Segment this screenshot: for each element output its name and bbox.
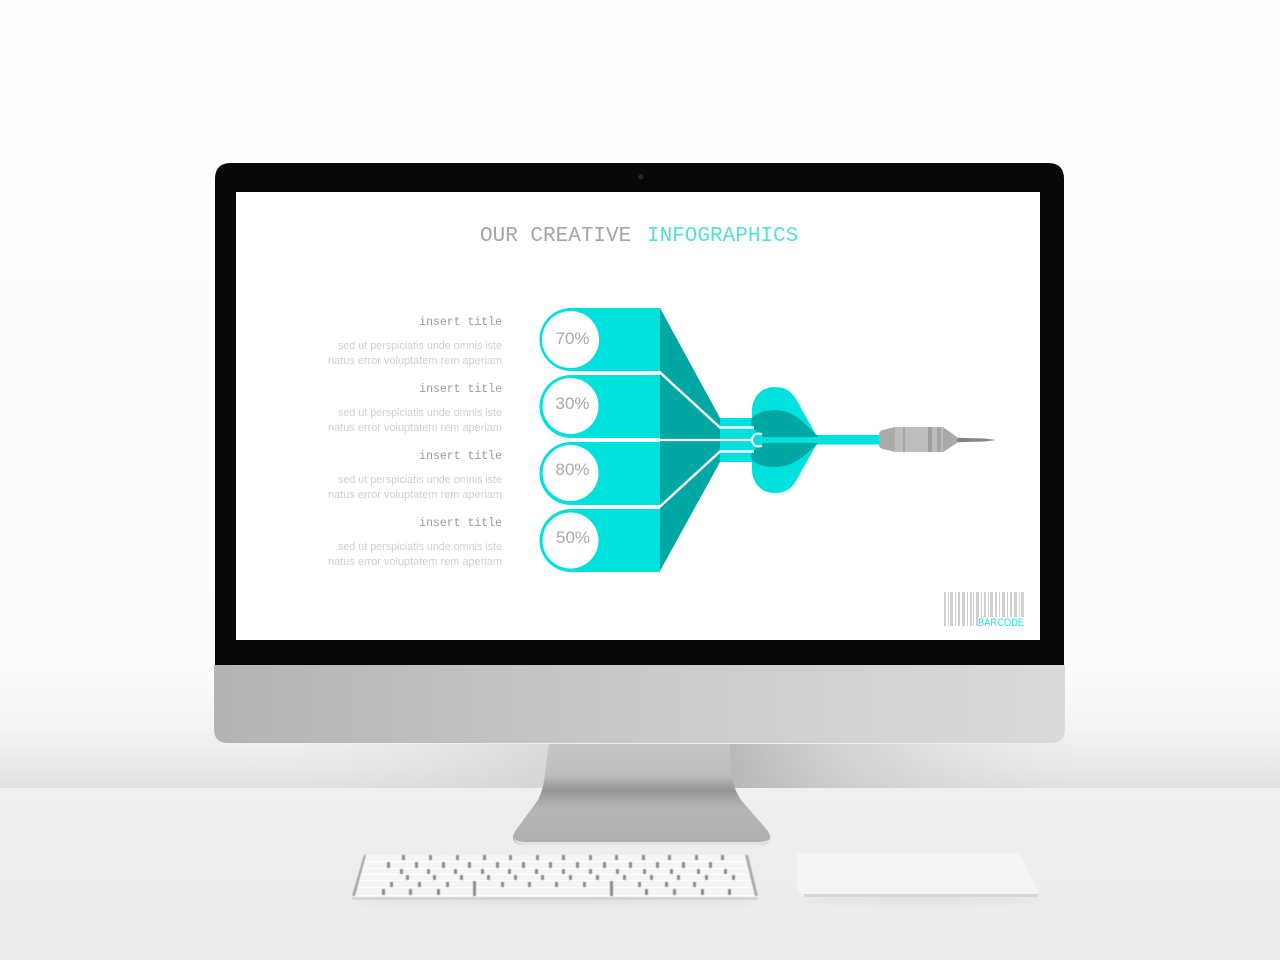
monitor chin [214,665,1065,743]
screen [236,192,1040,640]
text block: item 2: sed ut perspiciatis unde omnis iste [338,407,502,419]
text block: item 2: insert title [419,383,502,396]
dart infographic [539,308,996,572]
text block: item 3 [328,450,502,501]
dart needle [957,438,996,442]
keyboard [351,855,761,904]
row 2: 30% [540,375,660,438]
row 4: 50% [540,509,660,572]
text block: item 4: sed ut perspiciatis unde omnis iste [338,541,502,553]
funnel white dividers [539,372,755,506]
text block: item 4: insert title [419,517,502,530]
barcode [944,592,1025,629]
dart flight: light [752,387,819,493]
text block: item 4: natus error voluptatem rem aperiam [328,556,502,568]
dart flight: dark lower [751,443,818,467]
text block: item 3: natus error voluptatem rem aperiam [328,489,502,501]
trackpad [797,853,1040,902]
monitor shadow on wall [300,744,1070,788]
dart funnel: dark section [660,308,720,571]
text block: item 2: natus error voluptatem rem aperiam [328,422,502,434]
title: OUR CREATIVE [480,225,631,248]
barcode: BARCODE [978,617,1024,629]
row 3: 80% [540,442,660,505]
dart shaft [762,435,880,444]
monitor body [214,163,1065,743]
row 3: 80%: 80% [555,460,590,479]
row 4: 50%: 50% [556,528,590,547]
row 2: 30%: 30% [555,394,590,413]
text block: item 1: insert title [419,316,502,329]
text block: item 1 [328,316,502,367]
camera [638,174,644,180]
shaft ring [752,434,762,446]
monitor stand [513,744,770,845]
dart shaft tail [720,418,760,462]
dart barrel [879,427,957,452]
text block: item 4 [328,517,502,568]
text block: item 1: sed ut perspiciatis unde omnis iste [338,340,502,352]
monitor bezel [215,163,1064,666]
row 1: 70%: 70% [555,329,590,348]
text block: item 1: natus error voluptatem rem aperiam [328,355,502,367]
text block: item 3: insert title [419,450,502,463]
title: INFOGRAPHICS [647,225,798,248]
text block: item 2 [328,383,502,434]
dart flight: dark upper [751,410,818,437]
text block: item 3: sed ut perspiciatis unde omnis iste [338,474,502,486]
row 1: 70% [540,308,660,371]
